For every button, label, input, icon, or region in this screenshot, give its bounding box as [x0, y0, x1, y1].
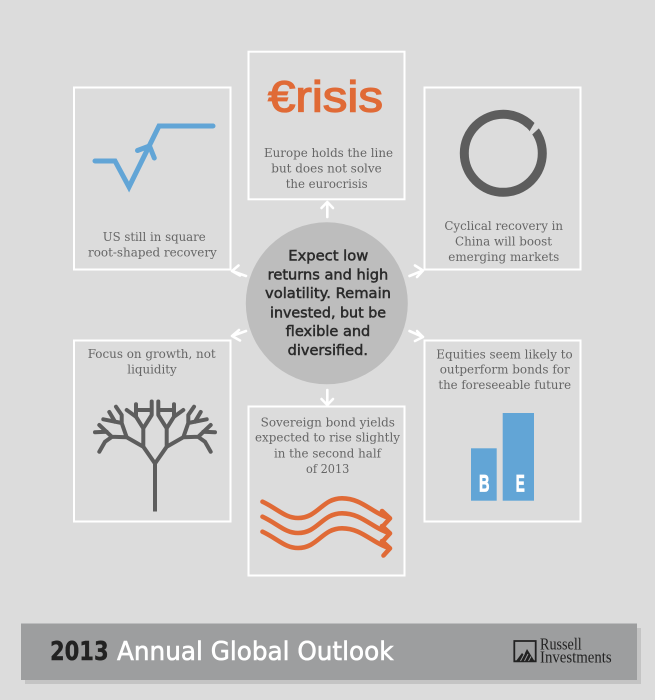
- caption: China: emerging markets: [448, 249, 559, 264]
- footer banner: [21, 624, 641, 684]
- icon: three wavy arrows: [262, 498, 390, 556]
- logo: Russell Investments: Russell: [540, 634, 582, 653]
- arrows from centre circle: [232, 202, 423, 405]
- central message text: diversified.: [288, 343, 368, 359]
- caption: US: [88, 229, 217, 260]
- caption: Europe: Europe holds the line: [264, 145, 393, 160]
- bar chart: bonds vs equities: E: [516, 471, 525, 498]
- logo: Russell Investments: Investments: [540, 647, 612, 666]
- central message text: returns and high: [268, 267, 388, 283]
- bar chart: bonds vs equities: [471, 413, 534, 501]
- central message circle: [246, 222, 408, 384]
- footer title: Annual Global Outlook: [117, 637, 394, 667]
- panel: growth: [74, 340, 230, 522]
- caption: equities: outperform bonds for: [440, 362, 570, 376]
- caption: bonds: of 2013: [306, 461, 349, 476]
- caption: Europe: but does not solve: [271, 161, 382, 176]
- central message text: flexible and: [286, 324, 370, 340]
- caption: equities: [436, 346, 573, 392]
- caption: Europe: the eurocrisis: [286, 176, 368, 191]
- caption: equities: Equities seem likely to: [436, 346, 573, 361]
- panel: sovereign bonds: [248, 406, 404, 576]
- caption: bonds: [255, 415, 400, 476]
- caption: China: China will boost: [455, 234, 552, 249]
- panel: Europe: [248, 52, 404, 199]
- caption: growth: [88, 346, 216, 376]
- caption: Europe: [264, 145, 393, 191]
- caption: China: Cyclical recovery in: [444, 218, 563, 233]
- footer title: 2013: [50, 637, 109, 667]
- panel: US recovery: [74, 88, 230, 270]
- logo: Russell Investments: [514, 634, 612, 666]
- icon: tree: [95, 402, 215, 512]
- icon: square root line with arrow: [95, 126, 213, 187]
- panel frame: [248, 52, 404, 199]
- panel frame: [248, 406, 404, 576]
- caption: bonds: in the second half: [274, 446, 382, 460]
- caption: bonds: Sovereign bond yields: [261, 415, 395, 430]
- panel: China: [424, 88, 580, 270]
- caption: growth: liquidity: [127, 362, 177, 376]
- panel frame: [74, 340, 230, 522]
- icon: eurocrisis wordmark: €risis: [268, 73, 383, 122]
- bar chart: bonds vs equities: B: [479, 471, 490, 498]
- panel: equities: [424, 340, 580, 522]
- caption: US: US still in square: [103, 229, 206, 244]
- central message text: Expect low: [288, 249, 368, 265]
- caption: equities: the foreseeable future: [438, 377, 571, 392]
- panel frame: [424, 88, 580, 270]
- panel frame: [74, 88, 230, 270]
- caption: US: root-shaped recovery: [88, 245, 217, 260]
- panel frame: [424, 340, 580, 522]
- caption: China: [444, 218, 563, 264]
- central message text: [265, 249, 391, 359]
- central message text: invested, but be: [270, 305, 386, 321]
- caption: bonds: expected to rise slightly: [255, 430, 400, 445]
- icon: circular arrow ring: [464, 114, 542, 192]
- caption: growth: Focus on growth, not: [88, 346, 216, 361]
- central message text: volatility. Remain: [265, 286, 391, 302]
